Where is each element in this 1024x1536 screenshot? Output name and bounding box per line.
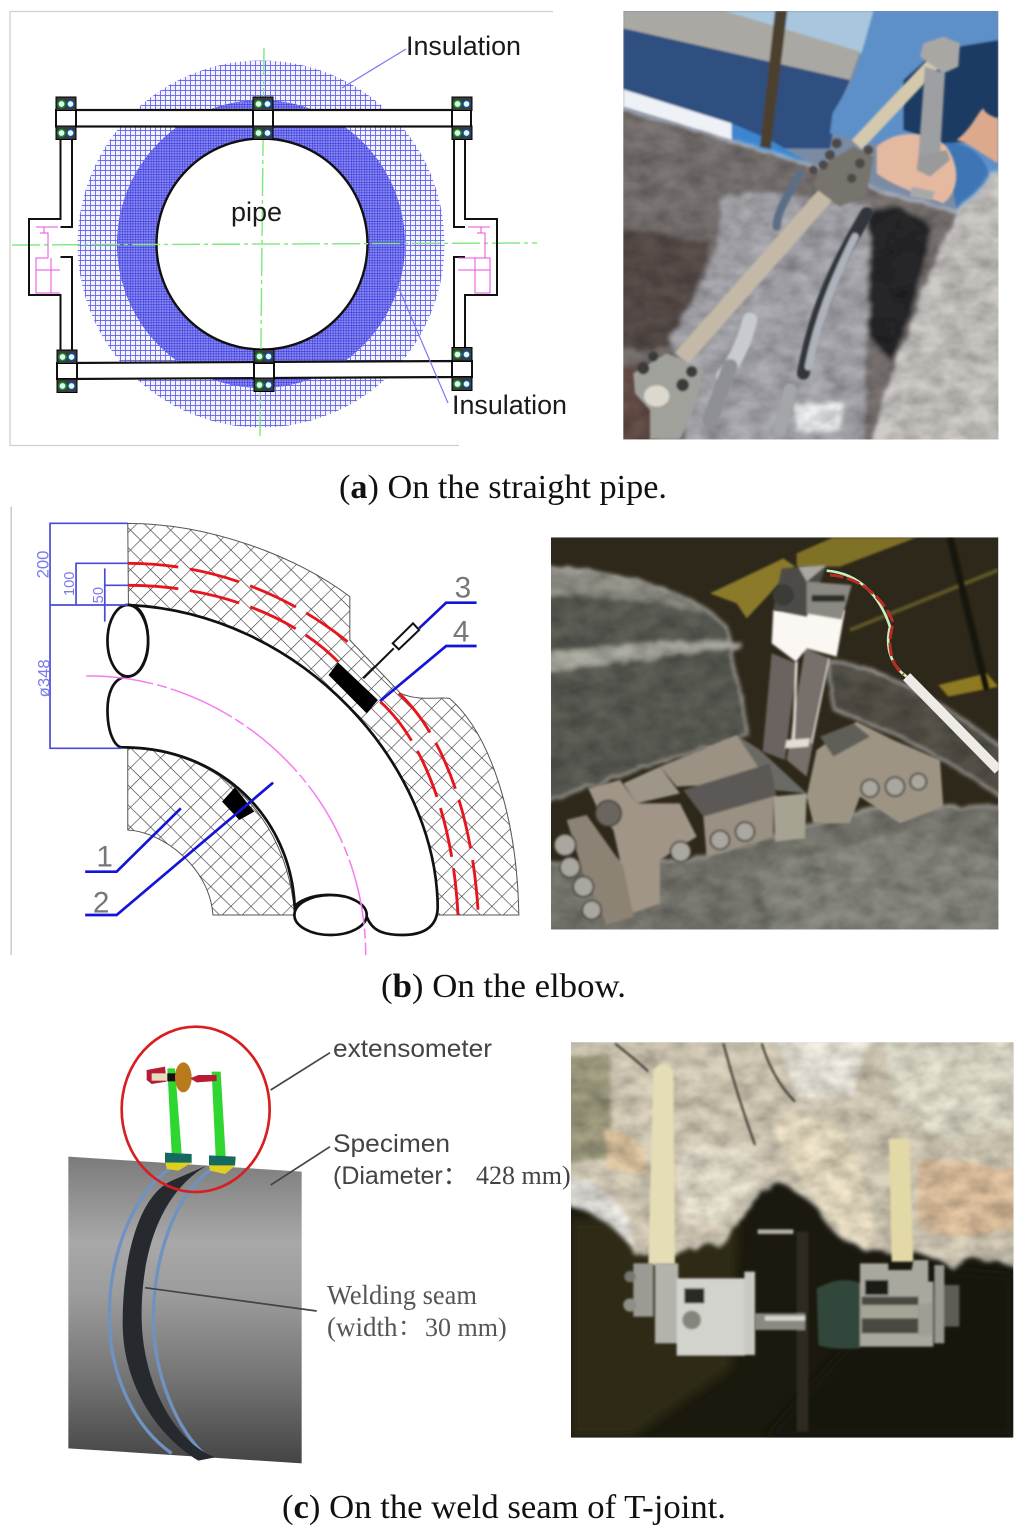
elbow outline bbox=[107, 605, 438, 935]
dimension labels: ø348 bbox=[34, 659, 53, 697]
sensor head bbox=[773, 565, 852, 619]
strain pads bbox=[222, 662, 378, 820]
part numbers: 2 bbox=[93, 887, 109, 920]
dimension labels: 100 bbox=[62, 572, 78, 596]
hand bbox=[877, 108, 998, 203]
label: welding seam: Welding seam bbox=[327, 1280, 477, 1310]
ceramic rods bbox=[648, 1064, 913, 1265]
panel: elbow drawing bbox=[11, 507, 519, 955]
mineral wool bbox=[571, 1042, 1014, 1272]
part numbers: 1 bbox=[96, 841, 113, 874]
flexure plates bbox=[763, 610, 845, 777]
wool cracks bbox=[615, 1043, 795, 1145]
centre line bbox=[86, 676, 366, 955]
right clamp bbox=[817, 1260, 959, 1349]
end ellipses bbox=[107, 605, 367, 935]
bottom clamp bbox=[633, 352, 703, 439]
ceiling beams bbox=[710, 537, 998, 697]
signal cable bbox=[827, 571, 998, 770]
pipe surface bbox=[623, 106, 960, 440]
label: diameter: (Diameter： bbox=[333, 1162, 468, 1190]
photo: extensometer on T-joint bbox=[552, 1028, 1024, 1438]
caption b: (b) On the elbow. bbox=[381, 968, 626, 1005]
label: width: 30 mm) bbox=[425, 1313, 507, 1342]
reference rings bbox=[109, 1168, 210, 1457]
probe bbox=[363, 623, 419, 678]
part numbers: 4 bbox=[453, 616, 469, 649]
insulation wool bbox=[870, 166, 998, 440]
photo: extensometer on straight pipe bbox=[623, 11, 998, 440]
frame: bottom bar bbox=[57, 348, 472, 392]
caption c: (c) On the weld seam of T-joint. bbox=[282, 1489, 726, 1526]
right side rail and sensor box bbox=[454, 139, 497, 347]
extensometer model bbox=[147, 1062, 236, 1174]
dark olive ground bbox=[571, 1218, 738, 1438]
insulation hatch bbox=[128, 523, 519, 915]
frame: top bar bbox=[56, 97, 472, 140]
dimension lines bbox=[50, 523, 128, 748]
panel: straight pipe drawing bbox=[10, 12, 567, 446]
label: pipe: pipe bbox=[231, 197, 282, 227]
leader line: upper insulation bbox=[342, 49, 406, 88]
embedded thermocouple arcs bbox=[128, 563, 478, 915]
weld seam bbox=[123, 1166, 215, 1461]
dimension labels bbox=[33, 551, 107, 697]
panel: T-joint weld diagram bbox=[68, 1027, 330, 1463]
label: width: (width： bbox=[327, 1312, 424, 1342]
top bracket bbox=[910, 37, 960, 200]
part numbers: 3 bbox=[455, 572, 471, 604]
clamp blocks bbox=[567, 722, 943, 925]
bolts bbox=[554, 774, 926, 919]
inner insulation ring bbox=[117, 100, 405, 388]
label: extensometer: extensometer bbox=[333, 1035, 492, 1063]
dimension labels: 50 bbox=[91, 587, 107, 603]
leader lines bbox=[85, 603, 477, 915]
centre band and bolt bbox=[755, 1232, 808, 1432]
label: insulation lower: Insulation bbox=[452, 390, 567, 420]
photo: extensometer on elbow bbox=[551, 537, 998, 930]
left side rail and sensor box bbox=[29, 139, 72, 350]
caption a: (a) On the straight pipe. bbox=[339, 469, 667, 506]
leader line: lower insulation bbox=[394, 277, 448, 403]
part numbers bbox=[93, 572, 471, 920]
label: diameter: 428 mm) bbox=[476, 1161, 571, 1190]
dimension labels: 200 bbox=[33, 551, 52, 578]
specimen cylinder bbox=[68, 1157, 302, 1463]
elbow surface bbox=[551, 563, 998, 930]
callout circle bbox=[122, 1027, 270, 1192]
pipe circle bbox=[156, 138, 368, 350]
left clamp bbox=[623, 1263, 755, 1356]
centre clamp bbox=[809, 138, 873, 207]
ceramic rods bbox=[682, 57, 940, 358]
centre lines bbox=[12, 48, 537, 437]
label: insulation upper: Insulation bbox=[406, 31, 521, 61]
outer insulation ring bbox=[78, 60, 444, 428]
leader lines bbox=[145, 1053, 330, 1311]
label: specimen: Specimen bbox=[333, 1130, 450, 1158]
steel bands bbox=[710, 173, 867, 430]
